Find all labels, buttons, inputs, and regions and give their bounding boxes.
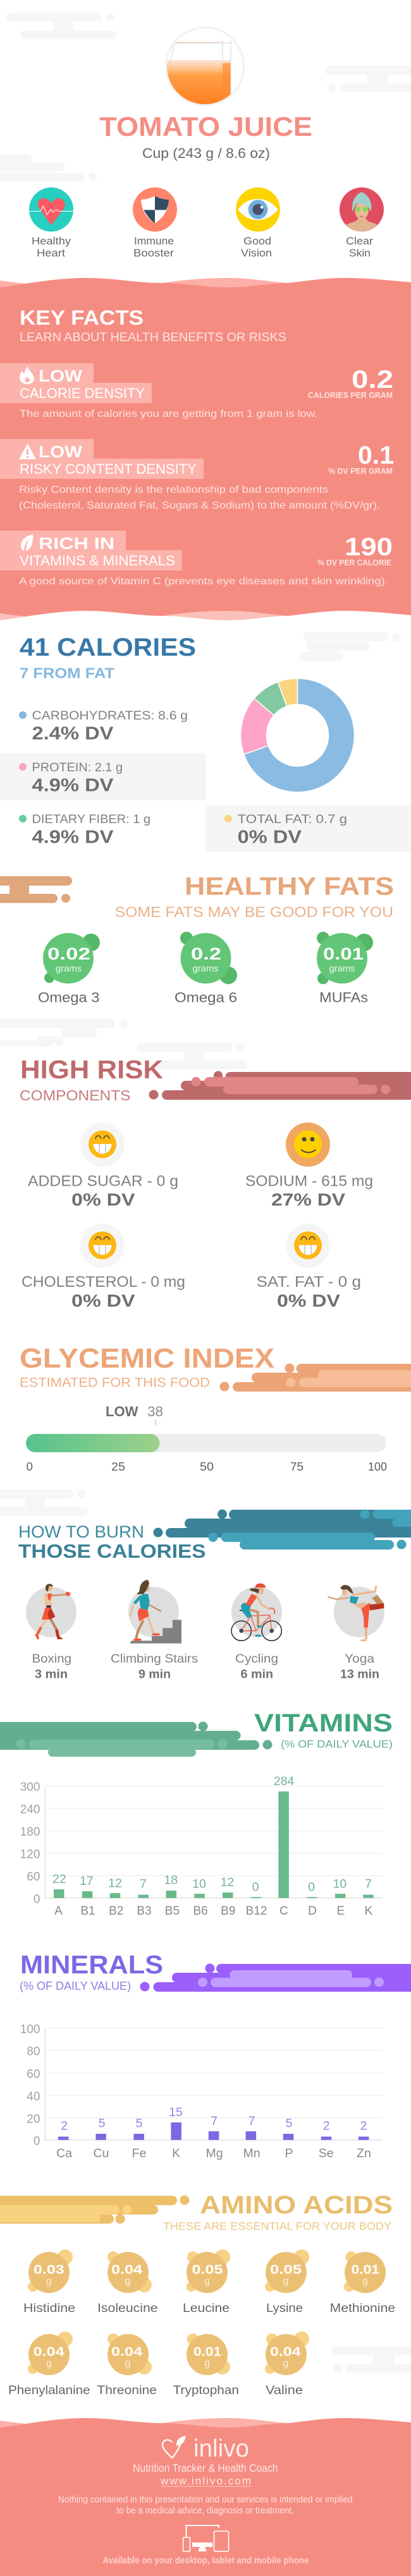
fact: low calorie density: The amount of calories you are getting from 1 gram is low. [20, 409, 317, 419]
value labels: 15 [169, 2105, 183, 2119]
heading: KEY FACTS [20, 306, 144, 329]
amino: valine: g [283, 2358, 288, 2369]
fact: rich in vitamins and minerals: RICH IN [39, 534, 114, 553]
fact: low calorie density: LOW [39, 366, 83, 385]
amino: leucine [183, 2249, 230, 2315]
x axis labels: P [285, 2146, 293, 2160]
amino: phenylalanine: Phenylalanine [8, 2383, 90, 2397]
value labels: 2 [323, 2119, 329, 2133]
background clouds [0, 1019, 247, 1069]
amino: threonine [97, 2333, 157, 2397]
fact: low risky content density: 0.1 [358, 442, 394, 469]
panel: minerals [20, 1950, 411, 2160]
icon: leaf [21, 534, 33, 551]
gauge scale: 25 [111, 1460, 125, 1473]
icon: face with towel [340, 188, 384, 232]
top wave [0, 278, 411, 294]
ribbon decoration [0, 2196, 190, 2224]
amino: phenylalanine [8, 2332, 90, 2397]
panel: footer [0, 2418, 411, 2576]
value labels: 12 [108, 1876, 122, 1890]
amino: valine: 0.04 [270, 2345, 302, 2359]
x axis labels: Mn [243, 2146, 261, 2160]
activity: boxing: 3 min [35, 1668, 68, 1682]
value labels: 2 [360, 2119, 367, 2133]
amino: histidine: 0.03 [34, 2263, 64, 2277]
benefit: clear skin: Skin [349, 247, 371, 259]
activity: cycling [231, 1583, 282, 1682]
x axis labels: B3 [137, 1905, 152, 1918]
activity: climbing stairs: 9 min [138, 1668, 171, 1682]
amino: valine: Valine [266, 2383, 303, 2397]
macro: total fat [206, 805, 411, 852]
y axis labels [20, 1781, 40, 1906]
risk: sodium [245, 1122, 373, 1209]
value labels [52, 1774, 372, 1894]
benefit: healthy heart [29, 188, 73, 259]
background cloud [331, 2346, 411, 2373]
x axis labels: B12 [246, 1905, 267, 1918]
panel: amino acids [0, 2191, 411, 2397]
fact: low calorie density: CALORIE DENSITY [20, 385, 145, 401]
gauge value [106, 1404, 163, 1426]
fact: low risky content density [0, 439, 394, 511]
heading: THOSE CALORIES [18, 1540, 206, 1562]
serving size: Cup (243 g / 8.6 oz) [142, 145, 270, 161]
risk: saturated fat: 0% DV [277, 1291, 340, 1310]
fact: rich in vitamins and minerals: A good source of Vitamin C (prevents eye diseases and skin wrinkling). [19, 576, 388, 587]
icon: grin emoji [294, 1232, 322, 1260]
disclaimer: Nothing contained in this presentation and our services is intended or implied [58, 2495, 353, 2505]
macro: protein [0, 754, 206, 800]
amino: lysine: Lysine [266, 2301, 303, 2315]
heading: HOW TO BURN [18, 1522, 144, 1541]
heading: VITAMINS [254, 1709, 393, 1737]
illustration: cyclist [231, 1583, 282, 1640]
y axis labels: 180 [20, 1826, 40, 1839]
amino: threonine: g [125, 2358, 130, 2369]
activity: boxing: Boxing [32, 1652, 71, 1666]
benefit: immune booster: Booster [133, 247, 174, 259]
subheading: COMPONENTS [20, 1087, 130, 1104]
amino: methionine: g [362, 2276, 368, 2287]
value labels: 0 [252, 1880, 259, 1894]
background cloud [299, 632, 401, 661]
amino: threonine: Threonine [97, 2383, 157, 2397]
risk: cholesterol: 0% DV [71, 1291, 135, 1310]
amino: isoleucine: g [125, 2276, 130, 2287]
macro: total fat: 0% DV [238, 828, 302, 848]
value labels: 12 [221, 1875, 234, 1889]
amino: tryptophan: Tryptophan [173, 2383, 239, 2397]
value labels: 5 [136, 2117, 143, 2131]
y axis labels: 0 [34, 1893, 40, 1906]
y axis labels: 60 [27, 1870, 40, 1884]
fat: omega 6: grams [192, 963, 219, 974]
ribbon decoration [0, 876, 72, 903]
amino: methionine: 0.01 [352, 2263, 379, 2277]
y axis labels: 240 [20, 1803, 40, 1817]
heading: HEALTHY FATS [185, 873, 394, 901]
panel: how to burn those calories [0, 1490, 411, 1682]
activity: yoga: Yoga [345, 1652, 374, 1666]
x axis labels: Zn [357, 2146, 371, 2160]
risk: sodium: SODIUM - 615 mg [245, 1172, 373, 1190]
availability note: Available on your desktop, tablet and mobile phone [102, 2556, 309, 2566]
macro: dietary fiber [19, 812, 150, 848]
x axis labels: Fe [132, 2146, 146, 2160]
x axis labels [56, 2146, 371, 2160]
value labels: 2 [61, 2119, 68, 2133]
gauge scale: 50 [200, 1460, 214, 1473]
subheading: (% OF DAILY VALUE) [281, 1738, 393, 1750]
amino: threonine: 0.04 [111, 2345, 143, 2359]
y axis labels: 0 [34, 2135, 40, 2148]
amino: lysine: 0.05 [270, 2263, 302, 2277]
y axis labels [20, 2023, 40, 2148]
activity: climbing stairs: Climbing Stairs [111, 1652, 198, 1666]
illustration: boxer [26, 1584, 77, 1639]
website link: www.inlivo.com [160, 2475, 251, 2487]
ribbon decoration [140, 1963, 411, 1992]
fat: omega 3: 0.02 [47, 944, 90, 963]
y axis labels: 60 [27, 2067, 40, 2081]
amino: leucine: 0.05 [192, 2263, 223, 2277]
x axis labels: Ca [56, 2146, 72, 2160]
panel: key facts [0, 278, 411, 627]
risk: added sugar: 0% DV [71, 1190, 135, 1209]
bottom wave [0, 611, 411, 627]
amino: methionine: Methionine [330, 2301, 395, 2315]
y axis labels: 100 [20, 2023, 40, 2036]
icon: flame [20, 366, 34, 384]
amino: lysine [265, 2249, 309, 2315]
x axis labels: Se [319, 2146, 334, 2160]
gauge value: LOW [106, 1404, 138, 1419]
y axis labels: 300 [20, 1781, 40, 1794]
macro: carbohydrates [19, 709, 188, 744]
heading: MINERALS [20, 1950, 163, 1979]
fat: omega 3 [38, 933, 100, 1006]
panel: calories [0, 632, 411, 852]
macro: carbohydrates: 2.4% DV [32, 724, 114, 744]
activity: climbing stairs [111, 1580, 198, 1682]
heading: HIGH RISK [20, 1055, 163, 1084]
icon: smile emoji [294, 1131, 322, 1159]
amino: valine [265, 2332, 309, 2397]
title: TOMATO JUICE [99, 112, 312, 142]
background clouds: header [0, 13, 411, 182]
fact: rich in vitamins and minerals [0, 531, 393, 587]
amino: leucine: g [204, 2276, 210, 2287]
bars [58, 2122, 369, 2140]
heading [18, 1522, 206, 1562]
gauge value: 38 [147, 1404, 163, 1419]
icon: eye [236, 188, 280, 232]
activity: yoga [328, 1585, 384, 1682]
x axis labels: B1 [80, 1905, 95, 1918]
fact: low risky content density: (Cholesterol, Saturated Fat, Sugars & Sodium) to the amount (%DV/gr). [19, 500, 380, 511]
ribbon decoration [149, 1071, 411, 1100]
subheading: ESTIMATED FOR THIS FOOD [20, 1375, 210, 1390]
amino: tryptophan: 0.01 [193, 2345, 221, 2359]
value labels: 7 [365, 1877, 372, 1891]
subheading: LEARN ABOUT HEALTH BENEFITS OR RISKS [20, 330, 286, 344]
amino: leucine: Leucine [183, 2301, 230, 2315]
value labels [61, 2105, 367, 2133]
y axis labels: 20 [27, 2112, 40, 2126]
bar chart: minerals [20, 2023, 383, 2160]
illustration: woman climbing stairs [128, 1580, 181, 1644]
icon: warning triangle [19, 443, 36, 459]
value labels: 284 [274, 1774, 294, 1788]
x axis labels: B6 [193, 1905, 208, 1918]
value labels: 7 [248, 2114, 255, 2128]
logo: inlivo: inlivo [193, 2435, 249, 2462]
x axis labels: B2 [109, 1905, 123, 1918]
risk: cholesterol: CHOLESTEROL - 0 mg [21, 1273, 185, 1291]
icon: grin emoji [89, 1232, 116, 1260]
gauge scale [27, 1460, 387, 1473]
fact: rich in vitamins and minerals: VITAMINS & MINERALS [20, 553, 175, 569]
illustration: yoga pose [328, 1585, 384, 1641]
benefit: good vision [236, 188, 280, 259]
activity: boxing [26, 1584, 77, 1682]
icon: shield [133, 188, 177, 232]
amino: tryptophan [173, 2333, 239, 2397]
fact: low calorie density: 0.2 [352, 366, 393, 394]
amino: lysine: g [283, 2276, 288, 2287]
ribbon decoration [220, 1363, 411, 1392]
macro: dietary fiber: 4.9% DV [32, 828, 114, 848]
gauge bar [26, 1434, 386, 1452]
fact: low calorie density [0, 363, 393, 419]
benefit: good vision: Vision [241, 247, 272, 259]
ribbon decoration [0, 1722, 272, 1757]
amino: tryptophan: g [204, 2358, 210, 2369]
amino: isoleucine: 0.04 [111, 2263, 143, 2277]
macro: total fat: TOTAL FAT: 0.7 g [238, 812, 347, 826]
food image: glass of tomato juice [166, 28, 244, 107]
value labels: 22 [52, 1872, 66, 1886]
x axis labels: Mg [206, 2146, 223, 2160]
macro: protein: 4.9% DV [32, 776, 114, 796]
bar chart: vitamins [20, 1774, 383, 1918]
panel: vitamins [0, 1709, 393, 1918]
y axis labels: 40 [27, 2090, 40, 2104]
fact: low risky content density: % DV PER GRAM [328, 466, 393, 476]
amino: phenylalanine: g [46, 2358, 52, 2369]
benefit: healthy heart: Healthy [32, 235, 71, 247]
heading: 41 CALORIES [20, 634, 196, 661]
icon: heart [29, 188, 73, 232]
risk: saturated fat [257, 1224, 361, 1310]
fact: rich in vitamins and minerals: % DV PER CALORIE [317, 558, 391, 567]
fat: MUFAs: 0.01 [323, 944, 364, 963]
bars [54, 1791, 374, 1898]
value labels: 18 [164, 1874, 178, 1887]
background cloud [0, 1490, 88, 1516]
value labels: 7 [211, 2114, 218, 2128]
fat: MUFAs: MUFAs [319, 989, 368, 1006]
x axis labels: K [365, 1905, 373, 1918]
grid [45, 2028, 383, 2117]
benefit: good vision: Good [243, 235, 271, 247]
x axis labels: B5 [165, 1905, 180, 1918]
panel: glycemic index [20, 1343, 411, 1473]
benefit: clear skin: Clear [346, 235, 373, 247]
value labels: 7 [140, 1877, 147, 1891]
gauge scale: 100 [368, 1460, 387, 1473]
fat: omega 3: Omega 3 [38, 989, 100, 1006]
donut chart [241, 678, 354, 792]
fat: MUFAs [317, 932, 373, 1006]
x axis labels: Cu [94, 2146, 109, 2160]
value labels: 5 [286, 2117, 293, 2131]
benefit: clear skin [340, 188, 384, 259]
value labels: 0 [308, 1880, 315, 1894]
fact: low calorie density: CALORIES PER GRAM [308, 390, 393, 400]
fact: rich in vitamins and minerals: 190 [345, 533, 393, 561]
value labels: 17 [80, 1874, 94, 1888]
amino: phenylalanine: 0.04 [34, 2345, 65, 2359]
subheading: SOME FATS MAY BE GOOD FOR YOU [115, 903, 393, 920]
fact: low risky content density: RISKY CONTENT DENSITY [20, 461, 197, 477]
activity: cycling: 6 min [240, 1668, 273, 1682]
subheading: (% OF DAILY VALUE) [20, 1980, 131, 1992]
risk: cholesterol [21, 1224, 185, 1310]
fat: omega 6: Omega 6 [175, 989, 237, 1006]
amino: isoleucine [97, 2251, 158, 2315]
risk: sodium: 27% DV [271, 1190, 345, 1209]
icon: grin emoji [89, 1131, 116, 1159]
fat: omega 6: 0.2 [191, 944, 221, 963]
logo: inlivo [163, 2435, 249, 2462]
value labels: 5 [99, 2117, 106, 2131]
amino: methionine [330, 2251, 395, 2315]
subheading: THESE ARE ESSENTIAL FOR YOUR BODY [163, 2220, 391, 2232]
y axis labels: 80 [27, 2045, 40, 2059]
benefit: healthy heart: Heart [37, 247, 65, 259]
panel: healthy fats [0, 873, 394, 1006]
y axis labels: 120 [20, 1848, 40, 1862]
macro: carbohydrates: CARBOHYDRATES: 8.6 g [32, 709, 188, 723]
tagline: Nutrition Tracker & Health Coach [133, 2462, 278, 2474]
value labels: 10 [192, 1877, 206, 1891]
x axis labels: K [172, 2146, 180, 2160]
risk: saturated fat: SAT. FAT - 0 g [257, 1273, 361, 1291]
fat: omega 6 [175, 932, 237, 1006]
subheading: 7 FROM FAT [20, 665, 114, 681]
heading: GLYCEMIC INDEX [20, 1343, 274, 1374]
icon: devices [183, 2525, 229, 2551]
x axis labels: C [279, 1905, 288, 1918]
activity: yoga: 13 min [340, 1668, 379, 1682]
risk: added sugar: ADDED SUGAR - 0 g [28, 1172, 178, 1190]
fat: omega 3: grams [56, 963, 82, 974]
value labels: 10 [333, 1877, 347, 1891]
macro: protein: PROTEIN: 2.1 g [32, 761, 123, 774]
grid [45, 1786, 383, 1875]
x axis labels: A [54, 1905, 63, 1918]
ribbon decoration [153, 1510, 411, 1550]
x axis labels: E [337, 1905, 345, 1918]
disclaimer [58, 2495, 353, 2516]
gauge scale: 0 [27, 1460, 33, 1473]
macro: dietary fiber: DIETARY FIBER: 1 g [32, 812, 150, 826]
x axis labels: D [308, 1905, 317, 1918]
amino: histidine: g [46, 2276, 52, 2287]
amino: histidine [23, 2249, 75, 2315]
x axis labels [54, 1905, 373, 1918]
heading: AMINO ACIDS [200, 2191, 393, 2219]
benefit: immune booster: Immune [134, 235, 174, 247]
gauge scale: 75 [290, 1460, 304, 1473]
amino: histidine: Histidine [23, 2301, 75, 2315]
risk: added sugar [28, 1122, 178, 1209]
panel: high risk components [0, 1019, 411, 1310]
activity: cycling: Cycling [235, 1652, 278, 1666]
footer wave [0, 2418, 411, 2434]
x axis labels: B9 [221, 1905, 235, 1918]
fat: MUFAs: grams [329, 963, 355, 974]
benefit: immune booster [133, 188, 177, 259]
amino: isoleucine: Isoleucine [97, 2301, 158, 2315]
fact: low risky content density: LOW [39, 442, 83, 461]
fact: low risky content density: Risky Content density is the relationship of bad components [19, 485, 328, 495]
disclaimer: to be a medical advice, diagnosis or treatment. [116, 2506, 294, 2516]
